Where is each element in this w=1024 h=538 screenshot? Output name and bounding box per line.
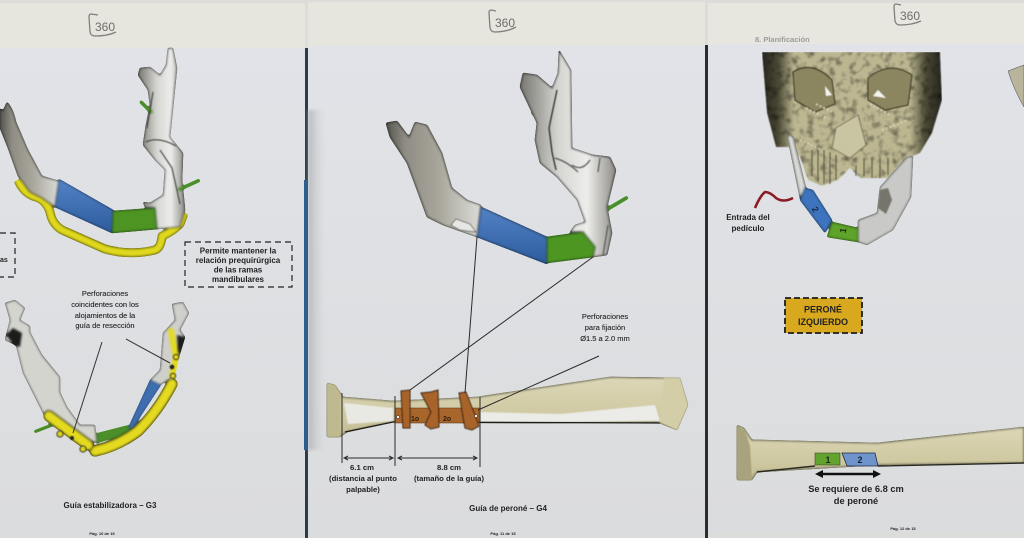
- callout box relation: [185, 242, 292, 287]
- green pin lower: [34, 425, 52, 432]
- left ramus lower: [5, 300, 97, 443]
- note perforations page 10: coincidentes con los: [71, 300, 139, 309]
- fibula segment numbers: 1: [825, 455, 831, 465]
- blue segment fibula: [842, 453, 878, 466]
- note perforations fixation: Ø1.5 a 2.0 mm: [580, 334, 630, 343]
- left ramus upper: [0, 102, 59, 207]
- lower mandible with guide: [5, 300, 189, 451]
- nasal bone: [832, 115, 866, 158]
- guide labels: 1o: [411, 416, 419, 423]
- logo 360 page 10: 360: [95, 20, 115, 34]
- dimension label 8.8 cm: [414, 463, 484, 483]
- green segment page 11: [547, 232, 595, 263]
- label pedicle entry: Entrada del: [726, 213, 770, 222]
- page 10 header band: [0, 3, 305, 48]
- teeth: [812, 150, 888, 184]
- panel: page 11 fibula guide: [304, 2, 708, 538]
- dimension label 8.8 cm: 8.8 cm: [437, 463, 461, 472]
- mandible segments: [787, 135, 913, 245]
- note perforations page 10: guía de resección: [75, 321, 135, 330]
- guide holes: [57, 354, 179, 452]
- green pins upper: [140, 101, 200, 190]
- label pedicle entry: [726, 213, 770, 233]
- green pins page 11: [532, 112, 628, 210]
- blue segment upper: [55, 179, 113, 233]
- double arrow: [815, 470, 881, 478]
- dark patch lower right: [177, 335, 185, 358]
- yellow guide lower: [95, 384, 172, 451]
- leader lines page 10: [73, 339, 170, 433]
- guide base: [395, 408, 479, 423]
- note perforations page 10: [71, 289, 139, 330]
- caption G3: Guía estabilizadora – G3: [64, 501, 157, 510]
- dimension label 6.1 cm: palpable): [346, 485, 380, 494]
- fibula page 11: [327, 377, 688, 437]
- page 10 sheet: [0, 46, 305, 535]
- page number 11: Pág. 11 de 15: [490, 531, 516, 536]
- white left band: [344, 403, 393, 424]
- panel: page 12 planning: [708, 3, 1024, 533]
- bone body: [327, 377, 688, 437]
- page 11 blue spine: [304, 180, 308, 450]
- logo 360 page 11: 360: [495, 16, 515, 30]
- dimension lines: [342, 393, 480, 467]
- page number 10: Pág. 10 de 15: [89, 531, 115, 536]
- page 11 sheet: [308, 44, 705, 535]
- green segment fibula: [815, 453, 840, 465]
- callout box cut off left: [0, 233, 15, 277]
- ramus details page 11: [451, 90, 608, 255]
- right ramus page 11: [520, 50, 616, 257]
- yellow guide upper: [18, 180, 184, 253]
- callout box relation: mandibulares: [212, 275, 265, 284]
- distal foot: [327, 383, 341, 437]
- underside shade: [757, 463, 1024, 472]
- blue segment page 11: [477, 207, 547, 264]
- green segment upper: [112, 208, 157, 233]
- cranium: [762, 52, 942, 186]
- next image bone edge: [1008, 65, 1024, 107]
- page 11 header band: [308, 2, 705, 46]
- fibula page 12: [737, 425, 1024, 480]
- right ramus upper: [138, 48, 185, 229]
- light speckle: [800, 104, 908, 150]
- logo 360 page 10: [89, 14, 116, 36]
- ankle: [737, 426, 752, 480]
- dimension label 6.1 cm: [329, 463, 397, 494]
- upper mandible with stabilizing guide: [0, 48, 200, 253]
- dark underside: [345, 422, 660, 432]
- page number 12: Pág. 12 de 15: [890, 526, 916, 531]
- mandible right: [858, 156, 913, 245]
- blue segment lower: [128, 380, 161, 428]
- page 12 header band: [708, 3, 1024, 44]
- guide ribs: [401, 390, 479, 430]
- pedicle red curve: [755, 192, 793, 208]
- mandible left strut: [787, 135, 806, 198]
- note required length: de peroné: [834, 496, 878, 506]
- label pedicle entry: pedículo: [732, 224, 765, 233]
- section title: 8. Planificación: [755, 35, 810, 44]
- note perforations page 10: alojamientos de la: [75, 311, 136, 320]
- dimension label 6.1 cm: (distancia al punto: [329, 474, 397, 483]
- proximal end: [660, 378, 688, 430]
- right ramus details page 10: [146, 92, 180, 204]
- mandible page 11: [386, 50, 628, 264]
- note perforations page 10: Perforaciones: [82, 289, 128, 298]
- green segment page 12: [827, 222, 858, 242]
- page 12 sheet: [708, 43, 1024, 533]
- label left fibula: [785, 298, 862, 333]
- callout box relation: Permite mantener la: [200, 246, 277, 256]
- callout box relation: de las ramas: [214, 266, 263, 274]
- page 11 left shadow: [308, 110, 328, 450]
- panel: page 10 stabilizing guide: [0, 3, 308, 538]
- guide hole: [396, 416, 400, 418]
- left ramus page 11: [386, 121, 481, 237]
- note perforations fixation: [580, 312, 630, 343]
- blue segment page 12: [800, 188, 832, 233]
- callout box cut off left: as: [0, 257, 8, 264]
- skull: [762, 52, 942, 245]
- dimension label 6.1 cm: 6.1 cm: [350, 463, 374, 472]
- note required length: Se requiere de 6.8 cm: [808, 484, 904, 494]
- right ramus lower: [150, 302, 189, 385]
- leader lines page 11: [410, 237, 599, 410]
- skull: 1: [838, 227, 848, 234]
- bone page 12: [737, 425, 1024, 480]
- mandible right texture: [878, 188, 892, 214]
- white lower band: [480, 405, 660, 423]
- label left fibula: PERONÉ: [804, 304, 842, 314]
- orbits: [793, 68, 912, 184]
- logo 360 page 11: [489, 10, 516, 32]
- green segment lower: [97, 425, 132, 443]
- logo 360 page 12: [894, 4, 921, 25]
- segment numbers: 2: [810, 205, 821, 214]
- fibula page 12: 2: [857, 455, 863, 465]
- fibula page 11: 2o: [443, 416, 451, 423]
- caption G4: Guía de peroné – G4: [469, 504, 547, 513]
- note perforations fixation: Perforaciones: [582, 312, 628, 321]
- page 11 right edge: [705, 45, 708, 538]
- callout box relation: relación prequirúrgica: [196, 256, 281, 265]
- page 10 right edge: [305, 48, 308, 538]
- label left fibula: IZQUIERDO: [798, 317, 848, 327]
- dimension label 8.8 cm: (tamaño de la guía): [414, 474, 484, 483]
- note required length: [808, 484, 904, 506]
- dark patch lower left: [6, 328, 22, 347]
- orbit holes: [825, 86, 886, 98]
- logo 360 page 12: 360: [900, 9, 920, 23]
- note perforations fixation: para fijación: [585, 323, 625, 332]
